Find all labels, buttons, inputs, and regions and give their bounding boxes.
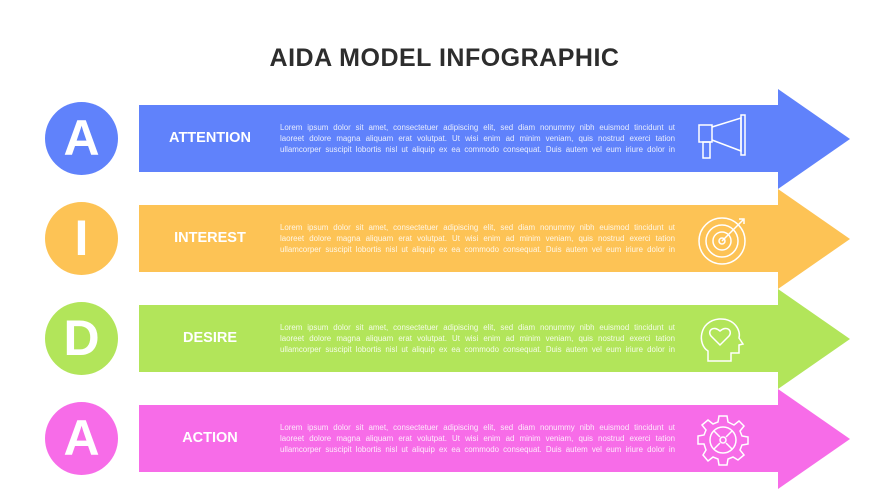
band [139, 205, 779, 272]
text: ullamcorper suscipit lobortis nisl ut aliquip ex ea commodo consequat. Duis autem vel eum iriure dolor in [280, 445, 675, 454]
text [280, 323, 675, 354]
arrow head [778, 189, 850, 289]
band [139, 405, 779, 472]
circle I [45, 202, 118, 275]
row: desire [45, 289, 850, 389]
circle D [45, 302, 118, 375]
arrow head [778, 289, 850, 389]
text: ullamcorper suscipit lobortis nisl ut aliquip ex ea commodo consequat. Duis autem vel eum iriure dolor in [280, 345, 675, 354]
circle A: A [63, 110, 100, 166]
arrow head [778, 389, 850, 489]
label: INTEREST [174, 230, 246, 246]
icon: head with heart [700, 318, 744, 362]
text: laoreet dolore magna aliquam erat volutpat. Ut wisi enim ad minim veniam, quis nostrud exerci tation [280, 134, 675, 143]
text: Lorem ipsum dolor sit amet, consectetuer adipiscing elit, sed diam nonummy nibh euismod tincidunt ut [280, 123, 675, 132]
text: Lorem ipsum dolor sit amet, consectetuer adipiscing elit, sed diam nonummy nibh euismod tincidunt ut [280, 423, 675, 432]
text: ullamcorper suscipit lobortis nisl ut aliquip ex ea commodo consequat. Duis autem vel eum iriure dolor in [280, 145, 675, 154]
title: AIDA MODEL INFOGRAPHIC [270, 44, 619, 72]
label: ACTION [182, 430, 238, 446]
text: laoreet dolore magna aliquam erat volutpat. Ut wisi enim ad minim veniam, quis nostrud exerci tation [280, 234, 675, 243]
circle D: D [63, 310, 100, 366]
band [139, 105, 779, 172]
text [280, 223, 675, 254]
row: attention [45, 89, 850, 189]
text [280, 423, 675, 454]
label: ATTENTION [169, 130, 251, 146]
text: Lorem ipsum dolor sit amet, consectetuer adipiscing elit, sed diam nonummy nibh euismod tincidunt ut [280, 223, 675, 232]
text: laoreet dolore magna aliquam erat volutpat. Ut wisi enim ad minim veniam, quis nostrud exerci tation [280, 334, 675, 343]
icon: target [698, 217, 746, 265]
row: action [45, 389, 850, 489]
circle A: A [63, 410, 100, 466]
text: laoreet dolore magna aliquam erat volutpat. Ut wisi enim ad minim veniam, quis nostrud exerci tation [280, 434, 675, 443]
icon: megaphone [698, 114, 746, 159]
band [139, 305, 779, 372]
row: interest [45, 189, 850, 289]
circle I: I [75, 210, 88, 266]
arrow head [778, 89, 850, 189]
icon: gear [697, 415, 749, 466]
label: DESIRE [183, 330, 237, 346]
circle A [45, 402, 118, 475]
text: Lorem ipsum dolor sit amet, consectetuer adipiscing elit, sed diam nonummy nibh euismod tincidunt ut [280, 323, 675, 332]
text [280, 123, 675, 154]
text: ullamcorper suscipit lobortis nisl ut aliquip ex ea commodo consequat. Duis autem vel eum iriure dolor in [280, 245, 675, 254]
circle A [45, 102, 118, 175]
